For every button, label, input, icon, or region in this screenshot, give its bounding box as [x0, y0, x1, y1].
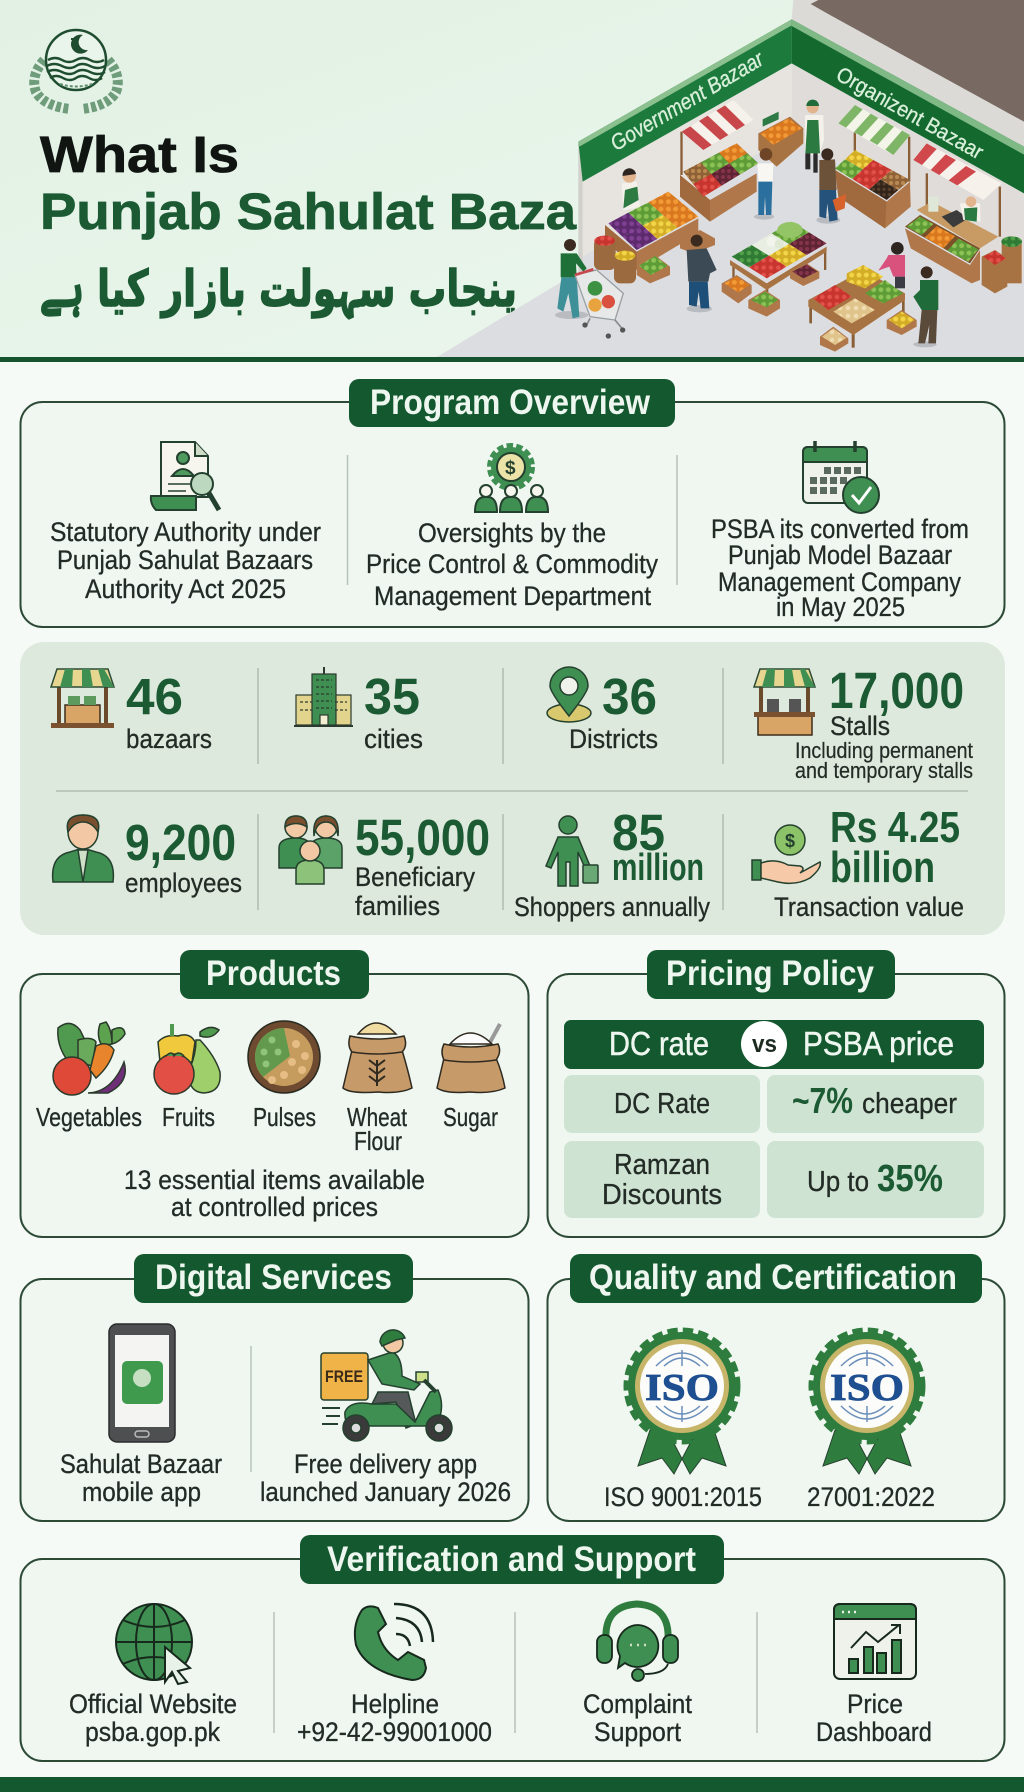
row: Ramzan discounts: Ramzan [614, 1149, 710, 1181]
header banner [0, 0, 1024, 362]
badge: ISO 9001 [628, 1332, 736, 1474]
stacked crates right [982, 236, 1022, 293]
sign: Government Bazaar [578, 19, 792, 182]
stat: 9,200 employees: employees [125, 868, 242, 898]
stat: Rs 4.25 billion [752, 803, 964, 922]
heading: products [180, 950, 369, 999]
roof [792, 0, 1024, 147]
panel: verification and support [20, 1535, 1004, 1761]
person: green apron vendor [805, 100, 824, 173]
table header: PSBA price [803, 1025, 954, 1062]
person: woman in pink [878, 242, 905, 288]
stall: right with cash counter [905, 143, 1002, 283]
icon: gear and team [475, 447, 548, 512]
person: white shirt shopper [754, 148, 774, 220]
stat: 36 districts [547, 667, 658, 754]
label: complaint support [583, 1689, 692, 1747]
table header: DC rate [609, 1025, 709, 1062]
stat: 17,000 stalls: Stalls [830, 711, 890, 741]
header rule [0, 357, 1024, 362]
label: 27001:2022: 27001:2022 [807, 1482, 935, 1512]
sign: Organizent Bazaar [792, 19, 1024, 193]
walls [578, 63, 1024, 277]
stat: 85 million shoppers: million [612, 847, 704, 889]
stat: 55,000 families [279, 809, 490, 921]
label: price dashboard [816, 1689, 932, 1747]
icon: delivery scooter [321, 1330, 452, 1441]
icon: calendar with check [803, 441, 879, 513]
labels: products: Flour [354, 1126, 402, 1156]
label: helpline: Helpline [351, 1689, 439, 1719]
label: complaint support: Support [594, 1717, 681, 1747]
label: helpline [297, 1689, 492, 1747]
badge: ISO 9001: ISO [645, 1367, 719, 1409]
stat: 35 cities: 35 [364, 668, 420, 725]
icon: helpline phone [355, 1604, 433, 1680]
stall: back right with green awning [835, 105, 911, 228]
table header: vs [752, 1031, 777, 1058]
text: mobile app [60, 1449, 222, 1507]
heading: quality and certification: Quality and Certification [589, 1258, 957, 1297]
person: dark jacket shopper [687, 235, 717, 312]
footer bar [0, 1777, 1024, 1792]
label: ISO 9001:2015: ISO 9001:2015 [604, 1482, 762, 1512]
icon: mobile phone [109, 1324, 175, 1442]
stat: 9,200 employees: 9,200 [125, 814, 236, 871]
text: mobile app: Sahulat Bazaar [60, 1449, 222, 1479]
text: delivery app: launched January 2026 [260, 1477, 511, 1507]
person: man in green [913, 266, 938, 347]
stat: 46 bazaars: bazaars [126, 724, 212, 754]
stat: 46 bazaars [51, 668, 212, 754]
icon: hand with coin: $ [785, 831, 795, 851]
row: Ramzan discounts: Up to [807, 1166, 869, 1198]
text: essential items: 13 essential items available [124, 1165, 425, 1195]
heading: program overview: Program Overview [370, 383, 651, 422]
text: mobile app: mobile app [82, 1477, 201, 1507]
stat: 55,000 families: 55,000 [355, 809, 490, 866]
text: delivery app [260, 1449, 511, 1507]
label: helpline: +92-42-99001000 [297, 1717, 492, 1747]
sign: Organizent Bazaar: Organizent Bazaar [832, 62, 988, 164]
stat: 85 million shoppers: Shoppers annually [514, 892, 710, 922]
text: statutory authority: Punjab Sahulat Bazaars [57, 545, 313, 575]
row: DC rate: ~7% [792, 1080, 853, 1121]
title: Punjab Sahulat Bazaar: Punjab Sahulat Baza [40, 183, 577, 240]
icon: hand with coin [752, 825, 820, 883]
panel: quality and certification [548, 1254, 1004, 1521]
text: conversion [711, 514, 969, 622]
stat: 35 cities [294, 667, 423, 754]
icon: globe with cursor [116, 1604, 192, 1684]
heading: digital services: Digital Services [155, 1258, 392, 1297]
stall: front left [605, 192, 698, 270]
person: vendor left [622, 168, 640, 211]
icon: map pin [547, 667, 591, 722]
panel: program overview [20, 379, 1004, 627]
logo: Punjab government emblem [34, 30, 118, 109]
stat: 55,000 families: Beneficiary [355, 862, 475, 892]
heading: products: Products [206, 954, 341, 993]
label: official website: Official Website [69, 1689, 237, 1719]
icon: stall [51, 669, 114, 728]
badge: ISO 27001: ISO [830, 1367, 904, 1409]
stat: Rs 4.25 billion: Rs 4.25 [830, 803, 960, 852]
text: conversion: in May 2025 [776, 592, 905, 622]
label: official website: psba.gop.pk [85, 1717, 220, 1747]
stat: 17,000 stalls [754, 662, 973, 783]
stat: 46 bazaars: 46 [126, 668, 183, 725]
illustration: isometric bazaar [437, 0, 1024, 357]
stat: Rs 4.25 billion: Transaction value [774, 892, 964, 922]
icon: price dashboard [834, 1604, 916, 1679]
stall: back left with red awning [680, 100, 758, 222]
person: man with shopping cart [555, 239, 625, 339]
icon: buildings [294, 667, 353, 726]
crate: back orange [758, 112, 803, 167]
text: essential items [124, 1165, 425, 1222]
panel: key statistics [20, 642, 1005, 935]
heading: pricing policy: Pricing Policy [666, 954, 874, 993]
table header [564, 1020, 984, 1069]
labels: products: Sugar [443, 1102, 498, 1132]
text: conversion: Punjab Model Bazaar [728, 540, 952, 570]
panel: digital services [20, 1254, 528, 1521]
text: conversion: PSBA its converted from [711, 514, 969, 544]
centre table [730, 222, 827, 298]
label: price dashboard: Price [847, 1689, 903, 1719]
title: Urdu: پنجاب سہولت بازار کیا ہے [40, 260, 517, 319]
stat: 85 million shoppers [514, 804, 710, 922]
text: oversight: Oversights by the [418, 518, 606, 548]
text: statutory authority: Statutory Authority under [50, 517, 321, 547]
label: price dashboard: Dashboard [816, 1717, 932, 1747]
icon: gear and team: $ [505, 458, 516, 479]
icon: legal document [151, 442, 219, 510]
row: DC rate: cheaper [862, 1088, 957, 1120]
icon: vegetables [53, 1022, 125, 1095]
stat: 17,000 stalls: Including permanent [795, 738, 973, 763]
floor [437, 133, 1024, 357]
text: statutory authority [50, 517, 321, 604]
icon: pulses bowl [248, 1021, 320, 1093]
barrels and crates [594, 230, 715, 283]
icon: headset [597, 1604, 678, 1681]
icon: fruits [154, 1024, 220, 1094]
labels: products: Pulses [253, 1102, 316, 1132]
row: DC rate: DC Rate [614, 1088, 710, 1120]
icon: delivery scooter: FREE [325, 1367, 363, 1386]
label: official website [69, 1689, 237, 1747]
sign: Government Bazaar: Government Bazaar [606, 45, 769, 156]
row: DC rate [564, 1075, 984, 1133]
stat: 85 million shoppers: 85 [612, 804, 665, 861]
text: statutory authority: Authority Act 2025 [85, 574, 286, 604]
panel: products [20, 950, 528, 1237]
labels: products: Vegetables [36, 1102, 142, 1132]
row: Ramzan discounts: Discounts [602, 1179, 722, 1211]
text: oversight: Management Department [374, 581, 651, 611]
stat: 36 districts: 36 [602, 668, 657, 725]
stat: 35 cities: cities [364, 724, 423, 754]
badge: ISO 27001 [813, 1332, 921, 1474]
stat: 17,000 stalls: and temporary stalls [795, 758, 973, 783]
labels: products [36, 1102, 498, 1156]
person: brown vest shopper [816, 148, 846, 224]
text: oversight: Price Control & Commodity [366, 549, 658, 579]
row: Ramzan discounts: 35% [877, 1158, 943, 1200]
front right table [808, 265, 917, 352]
icon: sugar sack [437, 1024, 505, 1092]
text: conversion: Management Company [718, 567, 961, 597]
label: complaint support: Complaint [583, 1689, 692, 1719]
text: essential items: at controlled prices [171, 1192, 378, 1222]
stat: 36 districts: Districts [569, 724, 658, 754]
icon: shopper [546, 816, 598, 886]
stat: 17,000 stalls: 17,000 [829, 662, 964, 719]
text: delivery app: Free delivery app [294, 1449, 477, 1479]
row: Ramzan discounts [564, 1141, 984, 1218]
stat: 9,200 employees [53, 814, 242, 898]
icon: family [279, 816, 342, 884]
stat: Rs 4.25 billion: billion [830, 843, 935, 892]
crates under centre table [722, 263, 819, 317]
text: oversight [366, 518, 658, 611]
heading: verification and support: Verification and Support [327, 1540, 696, 1579]
icon: employee [53, 815, 113, 882]
title: What Is: What Is [40, 126, 239, 183]
icon: stall with goods [754, 669, 815, 735]
icon: wheat flour sack [343, 1023, 412, 1092]
stat: 55,000 families: families [355, 891, 440, 921]
panel: pricing policy [548, 950, 1004, 1237]
labels: products: Wheat [347, 1102, 408, 1132]
labels: products: Fruits [162, 1102, 215, 1132]
